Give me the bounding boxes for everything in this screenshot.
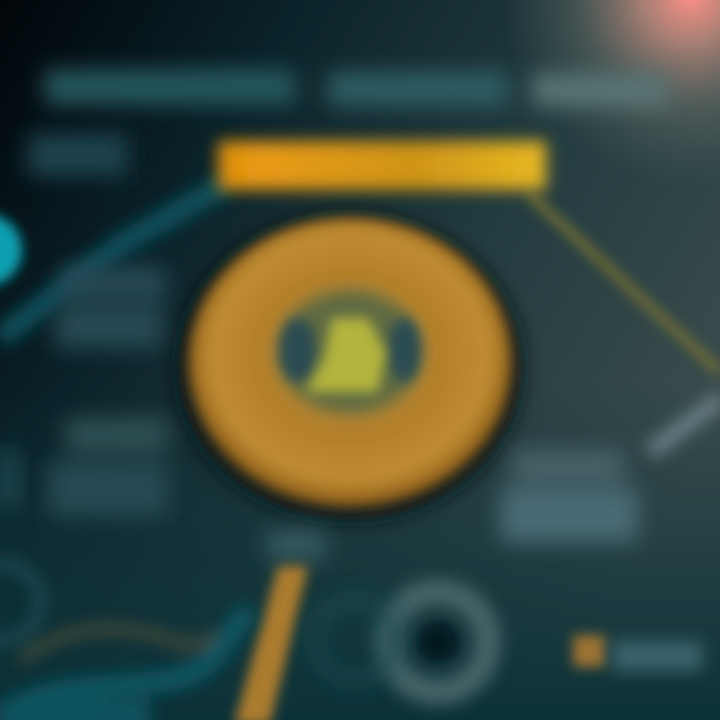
coin with bitcoin symbol <box>178 216 522 520</box>
text block: left lower <box>48 418 168 516</box>
icon: cyan circle at left edge <box>0 214 22 286</box>
text block: left upper <box>55 266 166 348</box>
title <box>45 70 668 106</box>
text block: left edge fragment <box>0 450 21 508</box>
orange vertical bar <box>234 566 308 720</box>
small heading label <box>28 134 128 176</box>
legend: orange square and label <box>573 635 702 671</box>
wave chart lower left <box>0 610 250 720</box>
connector: grey line at right <box>650 398 720 452</box>
coin body <box>188 217 512 507</box>
coin dark sides <box>280 318 420 382</box>
connector: teal line to left <box>0 183 228 338</box>
connector: yellow line to right <box>530 195 720 372</box>
text block: right <box>500 450 638 542</box>
yellow banner <box>218 141 546 190</box>
small label above orange bar <box>266 530 326 560</box>
icon: faint ring at left of gear <box>315 600 395 680</box>
icon: outline circle lower left <box>0 564 40 640</box>
bitcoin symbol <box>306 318 386 392</box>
legend label <box>612 641 702 671</box>
icon: gear ring <box>388 592 488 692</box>
coin shadow <box>178 216 522 520</box>
legend square <box>573 635 605 667</box>
coin inner ring <box>278 290 422 414</box>
